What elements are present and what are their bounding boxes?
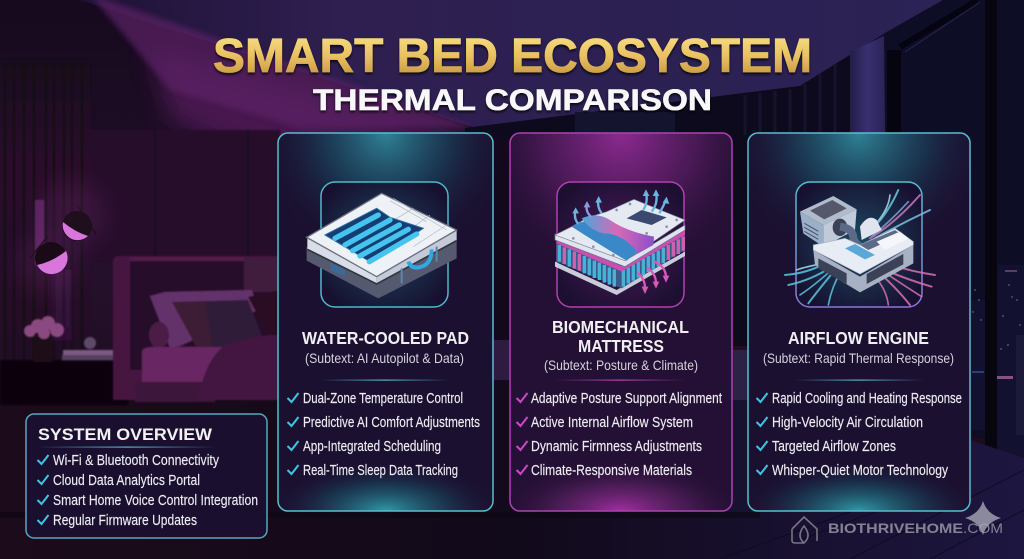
sheer curtain	[850, 36, 885, 135]
icon: water-cooled mattress pad	[307, 182, 457, 307]
panel: airflow engine	[748, 133, 970, 511]
panel: biomechanical mattress	[510, 133, 732, 511]
feature list: Active Internal Airflow System	[531, 415, 693, 431]
feature list: High-Velocity Air Circulation	[772, 415, 923, 431]
dark curtains	[465, 55, 850, 140]
icon: layered mattress with airflow arrows	[555, 182, 685, 307]
feature list: Rapid Cooling and Heating Response	[772, 391, 962, 407]
feature list: Predictive AI Comfort Adjustments	[303, 415, 480, 431]
feature list	[38, 453, 258, 529]
icon: airflow engine	[785, 182, 935, 307]
window	[885, 0, 1024, 470]
feature list: Smart Home Voice Control Integration	[53, 493, 258, 509]
slatted wall	[0, 60, 280, 400]
floor	[0, 400, 1024, 559]
feature list: Adaptive Posture Support Alignment	[531, 391, 722, 407]
bed glimpse between cards	[493, 340, 510, 380]
feature list: Regular Firmware Updates	[53, 513, 197, 529]
feature list	[288, 391, 480, 479]
subtext: (Subtext: Rapid Thermal Response)	[763, 350, 954, 366]
logo text: BIOTHRIVEHOME	[828, 520, 963, 536]
lamps	[18, 181, 106, 292]
main heading: SMART BED ECOSYSTEM	[213, 30, 812, 83]
bed	[113, 256, 280, 402]
title	[213, 30, 812, 117]
feature list: Wi-Fi & Bluetooth Connectivity	[53, 453, 220, 469]
subtitle: THERMAL COMPARISON	[313, 84, 712, 117]
feature list: Cloud Data Analytics Portal	[53, 473, 200, 489]
subtext: (Subtext: Posture & Climate)	[544, 357, 698, 373]
panel: system overview	[26, 414, 267, 538]
heading: MATTRESS	[578, 336, 664, 356]
icon: sparkle	[965, 501, 1001, 535]
feature list	[756, 391, 962, 479]
heading: WATER-COOLED PAD	[302, 328, 469, 348]
panel: water-cooled pad	[278, 133, 493, 511]
nightstand with flowers, books and clock	[0, 316, 128, 405]
subtext: (Subtext: AI Autopilot & Data)	[305, 350, 464, 366]
feature list: App-Integrated Scheduling	[303, 439, 441, 455]
heading: AIRFLOW ENGINE	[788, 328, 929, 348]
feature list	[516, 391, 722, 479]
feature list: Targeted Airflow Zones	[772, 439, 896, 455]
magenta wall wash	[150, 50, 470, 170]
watermark: biothrivehome.com	[792, 517, 1003, 543]
heading	[552, 317, 689, 356]
feature list: Real-Time Sleep Data Tracking	[303, 463, 458, 479]
heading: BIOMECHANICAL	[552, 317, 689, 337]
logo text: .COM	[963, 520, 1003, 536]
heading: SYSTEM OVERVIEW	[38, 426, 212, 444]
icon: house with leaf	[792, 517, 817, 543]
feature list: Dual-Zone Temperature Control	[303, 391, 463, 407]
ceiling	[80, 0, 943, 127]
feature list: Dynamic Firmness Adjustments	[531, 439, 702, 455]
feature list: Climate-Responsive Materials	[531, 463, 692, 479]
feature list: Whisper-Quiet Motor Technology	[772, 463, 949, 479]
